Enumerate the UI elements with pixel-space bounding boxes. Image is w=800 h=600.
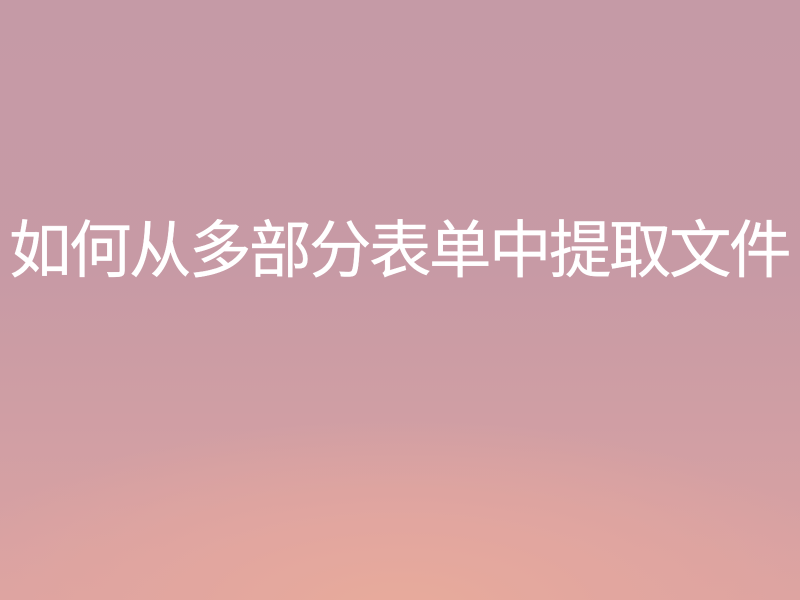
title: 如何从多部分表单中提取文件 [9, 216, 789, 286]
